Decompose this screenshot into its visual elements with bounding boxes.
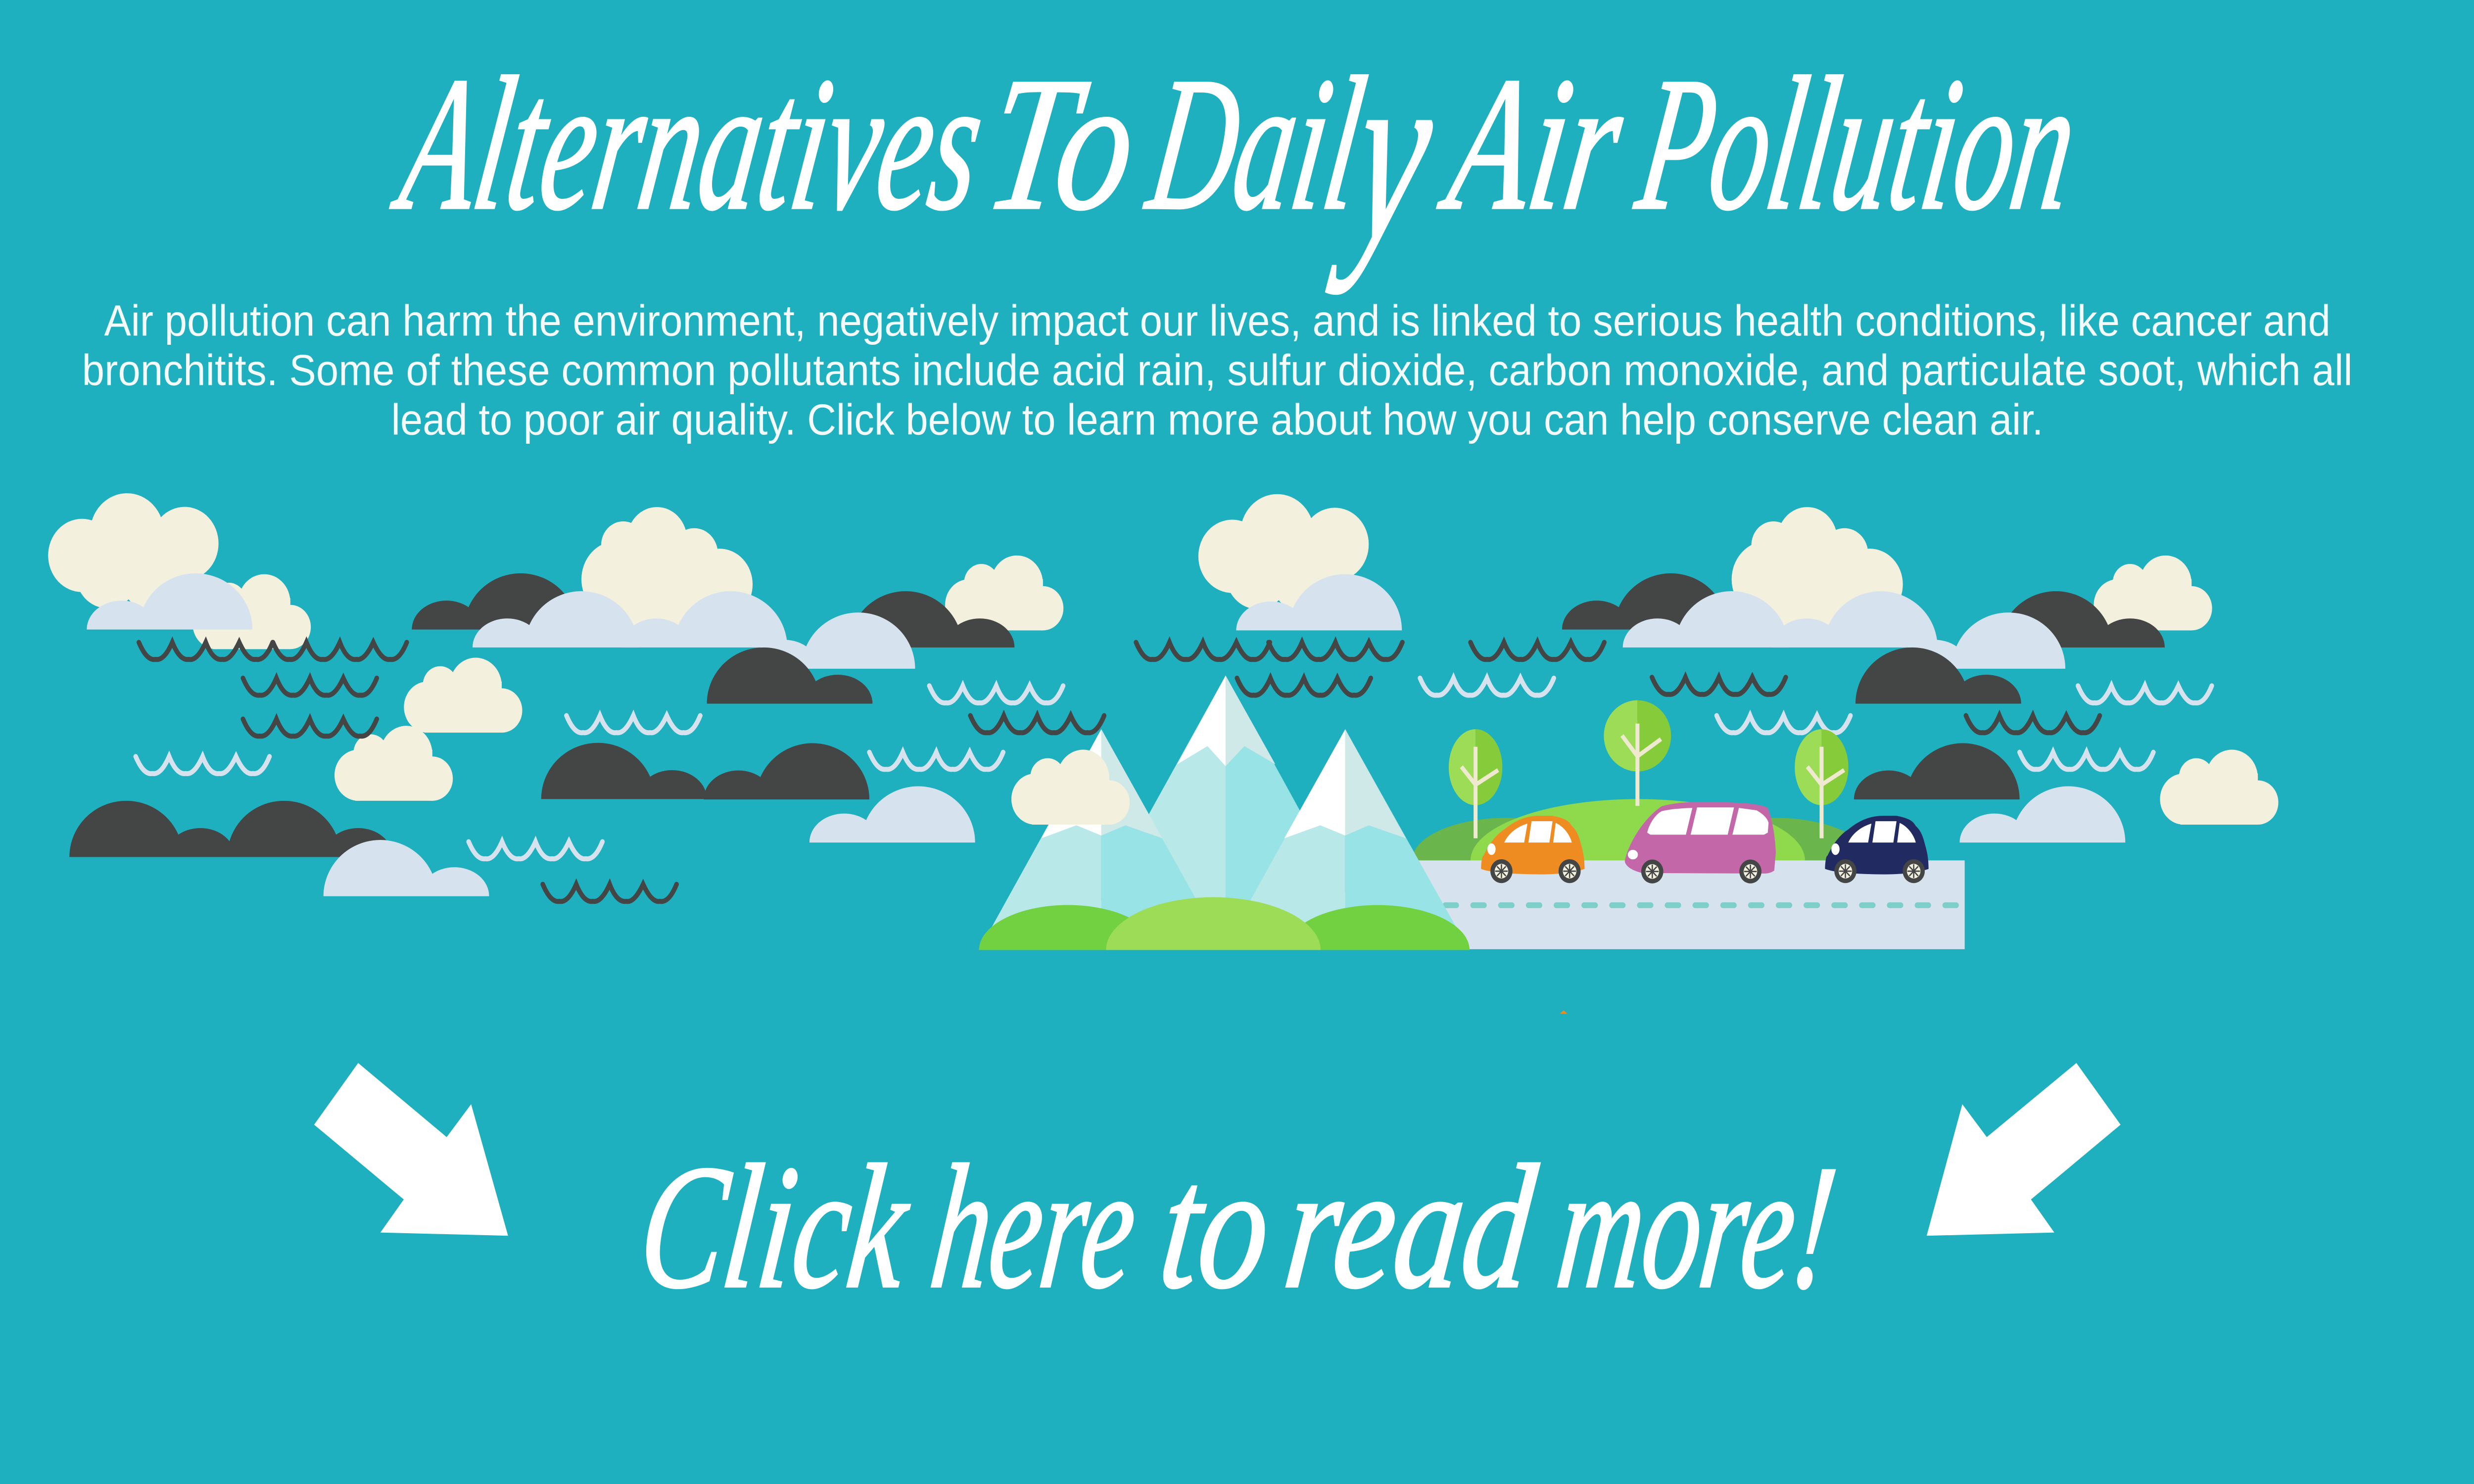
- title: Dail: [1138, 38, 1483, 249]
- call to action: Click: [631, 1128, 920, 1325]
- light blue clouds: [87, 573, 975, 896]
- call to action: read: [1277, 1128, 1546, 1325]
- trees: [1449, 700, 1849, 838]
- dark clouds, front: [541, 648, 872, 799]
- intro text block: bronchitits. Some of these common pollutants include acid rain, sulfur dioxide, carbon monoxide, and particulate soot, which all: [82, 346, 2352, 394]
- cream clouds, right: [1198, 494, 2279, 825]
- intro text block: lead to poor air quality. Click below to learn more about how you can help conserve clean air.: [391, 395, 2043, 444]
- call to action: here: [923, 1128, 1146, 1325]
- title: [376, 11, 2093, 294]
- car: purple van: [1625, 802, 1776, 883]
- dark clouds, right: [1562, 573, 2165, 648]
- call to action: [631, 1128, 1845, 1325]
- arrow: right: [1927, 1063, 2121, 1236]
- title: Pollution: [1625, 38, 2089, 249]
- light blue clouds, right: [1236, 574, 2125, 842]
- title: Alternatives: [383, 38, 996, 249]
- cream cloud over mountain: [1011, 749, 1130, 825]
- center mountain: [1090, 676, 1360, 920]
- intro text block: [82, 296, 2352, 444]
- title: y: [1324, 11, 1451, 294]
- title: To: [976, 38, 1148, 249]
- dark clouds: [69, 573, 1014, 857]
- car: navy: [1825, 816, 1929, 883]
- left mountain: [979, 729, 1224, 950]
- title: Air: [1430, 38, 1637, 249]
- dark clouds, right front: [1854, 648, 2021, 799]
- light wind waves: [136, 678, 2212, 859]
- mountains: [979, 676, 1469, 950]
- small orange speck: [1560, 1010, 1568, 1014]
- call to action: to: [1152, 1128, 1280, 1325]
- sky illustration: right clouds: [1198, 494, 2279, 842]
- right mountain: [1223, 729, 1469, 950]
- car: orange: [1481, 816, 1584, 883]
- front hills: [979, 897, 1470, 950]
- back hills: [1412, 799, 1870, 922]
- call to action: more!: [1549, 1128, 1845, 1325]
- sky illustration: left clouds: [48, 493, 1063, 896]
- cream clouds: [48, 493, 1063, 801]
- arrow: left: [314, 1063, 508, 1236]
- road: [1415, 860, 1965, 949]
- intro text block: Air pollution can harm the environment, negatively impact our lives, and is linked to serious health conditions, like cancer and: [104, 296, 2331, 345]
- dark wind waves: [139, 643, 2100, 901]
